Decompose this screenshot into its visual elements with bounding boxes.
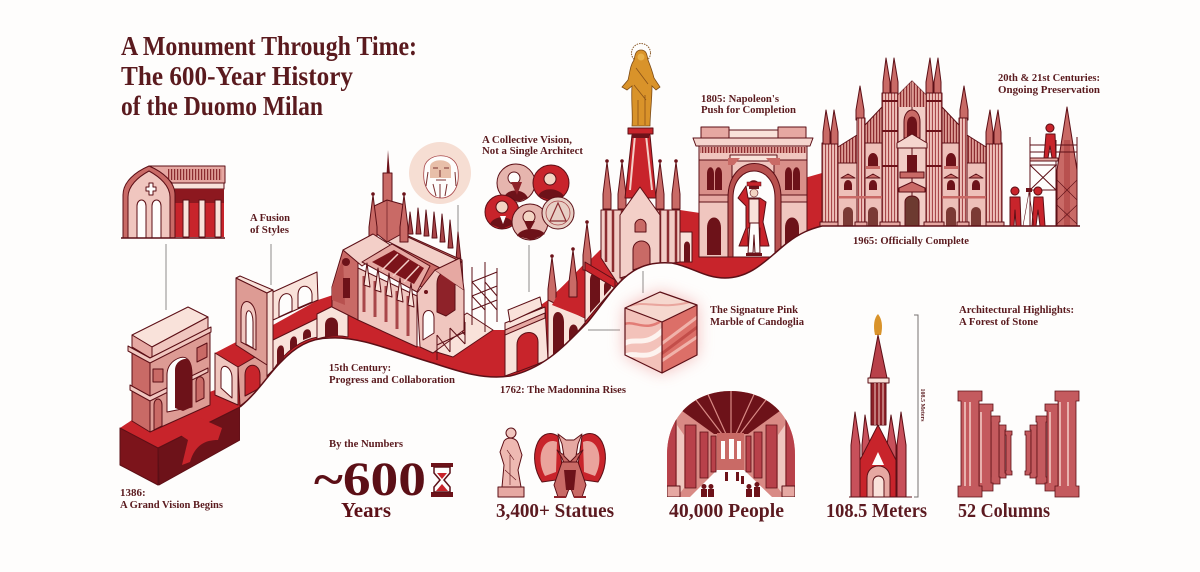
label: marble: Marble of Candoglia — [710, 316, 804, 328]
label: marble: The Signature Pink — [710, 304, 799, 316]
label: Napoleon — [701, 93, 796, 116]
stat: statues: 3,400+ Statues — [496, 500, 614, 522]
medallion 3 — [485, 195, 519, 229]
medallion 4 — [512, 204, 548, 240]
label: Madonnina: 1762: The Madonnina Rises — [500, 384, 627, 396]
stat: by the numbers: Years — [341, 498, 391, 522]
label: 15th century: Progress and Collaboration — [329, 374, 455, 386]
label: a fusion of styles: A Fusion — [250, 212, 290, 224]
leader lines — [166, 205, 529, 310]
building: triumphal arch — [128, 307, 211, 432]
worker on scaffold — [1044, 124, 1056, 158]
building: Napoleon arch — [693, 127, 813, 257]
label: 15th century: 15th Century: — [329, 362, 391, 374]
leader lines below ribbon — [588, 271, 643, 330]
label: collective vision: A Collective Vision, — [482, 134, 572, 146]
stat: by the numbers: ~600 — [314, 453, 426, 506]
label: 15th century — [329, 362, 455, 386]
stat: statues — [496, 428, 614, 522]
cover under ribbon — [240, 226, 822, 572]
scaffolding — [437, 262, 497, 360]
building: classical arcade — [505, 220, 615, 376]
label: architectural highlights: A Forest of Stone — [959, 316, 1038, 328]
building: cathedral under construction — [332, 150, 493, 357]
label: collective vision: Not a Single Architect — [482, 145, 583, 157]
portrait: Leonardo da Vinci — [409, 142, 471, 204]
title: A Monument Through Time: — [121, 31, 417, 61]
label: ongoing preservation: Ongoing Preservation — [998, 84, 1100, 96]
label: a fusion of styles: of Styles — [250, 224, 290, 236]
preservation scaffold and workers — [1010, 107, 1080, 226]
stat: people, nave: 40,000 People — [669, 500, 784, 522]
medallion 1 — [497, 164, 535, 202]
title: of the Duomo Milan — [121, 91, 323, 121]
portrait cluster: architects — [485, 164, 574, 240]
gargoyle — [535, 434, 605, 497]
foundation block — [120, 407, 240, 485]
worker with tablet — [1010, 187, 1021, 226]
label: a fusion of styles — [250, 212, 290, 236]
stat: people, nave — [667, 391, 795, 522]
label: officially complete: 1965: Officially Complete — [853, 235, 969, 247]
statue: golden Madonnina — [622, 44, 660, 126]
building: gothic and classical arcade — [215, 272, 348, 406]
medallion 2 — [533, 165, 569, 201]
statue — [498, 428, 524, 497]
label: ongoing preservation — [998, 72, 1100, 96]
figure: Napoleon — [738, 180, 769, 256]
stat: by the numbers: By the Numbers — [329, 438, 404, 450]
stat: columns: 52 Columns — [958, 500, 1050, 522]
stat: by the numbers — [314, 438, 426, 522]
surveyor — [1032, 187, 1045, 226]
label: ongoing preservation: 20th & 21st Centuries: — [998, 72, 1100, 84]
medallion 5 — [542, 197, 574, 229]
icon: gothic and classical fragment — [121, 166, 225, 238]
label: architectural highlights: Architectural Highlights: — [959, 304, 1074, 316]
label: a grand vision begins: 1386: — [120, 487, 146, 499]
building: main spire with Madonnina — [601, 128, 692, 284]
label: Napoleon: Push for Completion — [701, 104, 796, 116]
icon: hourglass — [431, 463, 453, 497]
label: a grand vision begins — [120, 487, 224, 511]
marble cube — [622, 292, 700, 373]
label: collective vision — [482, 134, 583, 157]
label: marble — [710, 304, 804, 328]
stat: height, tower — [826, 314, 927, 522]
title: The 600-Year History — [121, 61, 353, 91]
timeline red ribbon — [120, 173, 822, 448]
label: Napoleon: 1805: Napoleon's — [701, 93, 780, 105]
label: a grand vision begins: A Grand Vision Begins — [120, 499, 224, 511]
building: Duomo facade — [820, 58, 1010, 226]
stat: height, tower: 108.5 Meters — [919, 388, 925, 422]
stat: height, tower: 108.5 Meters — [826, 500, 927, 522]
title — [121, 31, 417, 121]
label: architectural highlights — [959, 304, 1074, 328]
infographic canvas — [120, 36, 1100, 522]
stat: columns — [958, 391, 1079, 522]
